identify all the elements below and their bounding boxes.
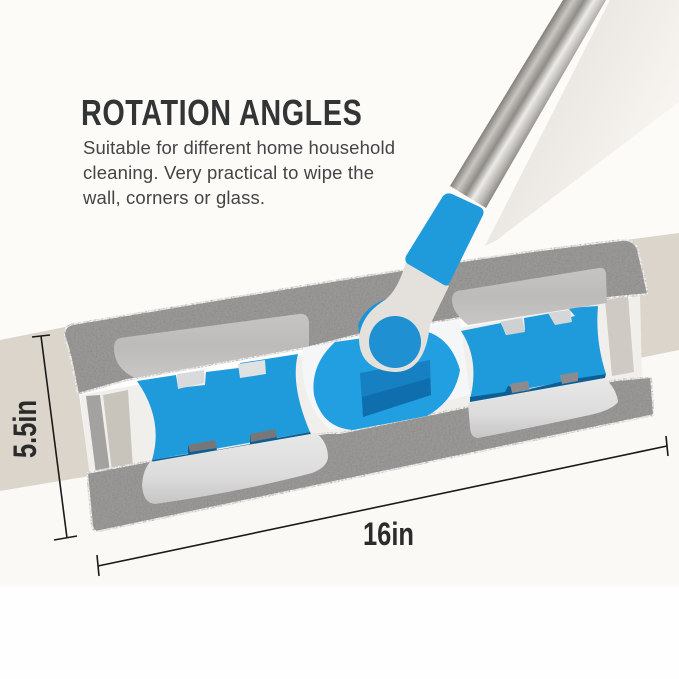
swivel cap [369, 316, 421, 368]
clamp notches [500, 318, 525, 335]
clamp notches [177, 370, 204, 389]
upper grey bumper [452, 268, 607, 325]
blue clamp body [461, 306, 606, 399]
mop handle [405, 0, 606, 286]
mop plate [80, 296, 642, 478]
description: Suitable for different home household [83, 137, 395, 158]
mop pad [64, 240, 654, 531]
microfiber pad: lower strip [87, 377, 654, 531]
description: cleaning. Very practical to wipe the [83, 162, 374, 183]
swivel arm [359, 262, 449, 372]
right clamp [452, 268, 618, 438]
title: ROTATION ANGLES [81, 92, 362, 133]
height label: 5.5in [7, 400, 43, 458]
blue dome [313, 330, 460, 430]
description: wall, corners or glass. [82, 187, 265, 208]
white centre insert [302, 320, 470, 430]
microfiber pad: upper strip [64, 240, 648, 394]
lower light bumper [468, 378, 618, 438]
upper grey bumper [114, 314, 309, 378]
centre mop joint [313, 262, 460, 430]
width label: 16in [363, 516, 414, 552]
blue clamp body [137, 354, 310, 460]
width dimension line [97, 436, 668, 576]
blue collar [405, 193, 484, 286]
steel tube [450, 0, 606, 208]
description [82, 137, 395, 208]
left clamp [114, 314, 328, 504]
height dimension line [32, 335, 77, 540]
blue shoulder behind arm [358, 298, 425, 372]
lower light bumper [142, 433, 328, 504]
